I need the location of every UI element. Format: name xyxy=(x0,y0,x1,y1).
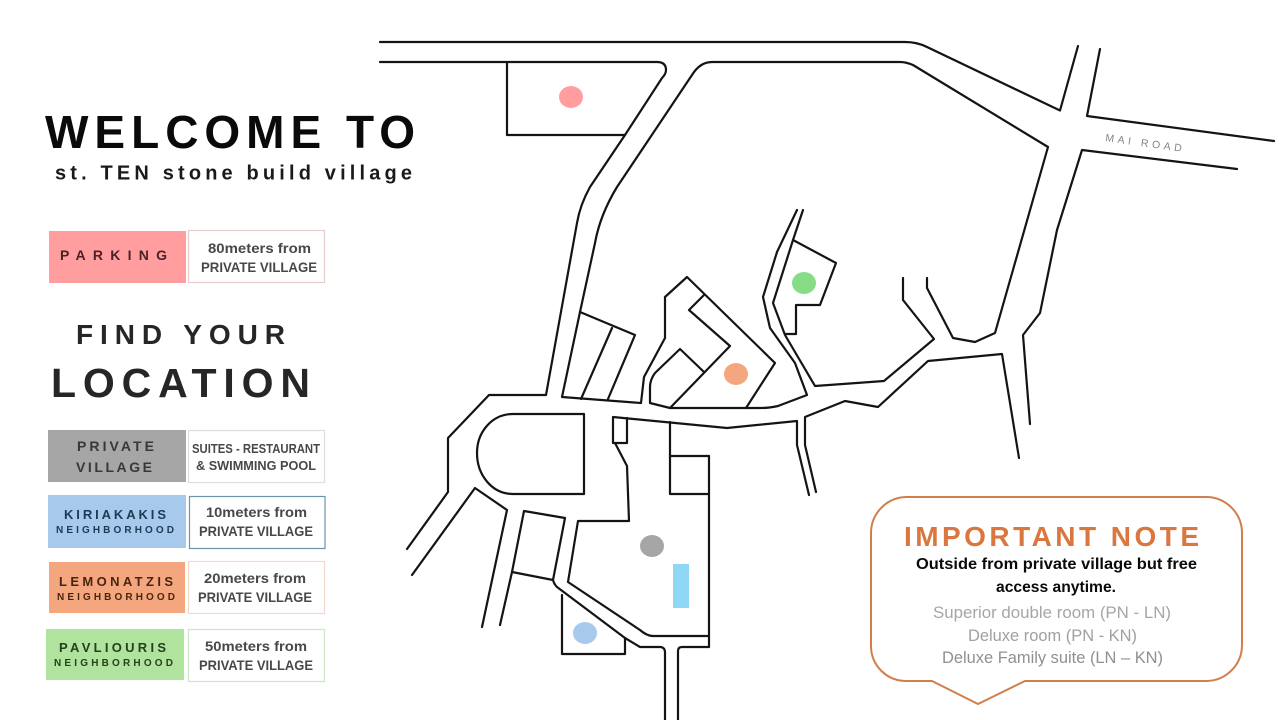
map marker: kiriakakis xyxy=(573,622,597,644)
legend row: pavliouris: NEIGHBORHOOD xyxy=(54,658,173,669)
legend row: private village: & SWIMMING POOL xyxy=(196,458,316,473)
map marker: swimming pool xyxy=(673,564,689,608)
callout: important note xyxy=(871,497,1242,704)
heading: find your location: FIND YOUR xyxy=(76,319,285,350)
legend row: parking: PARKING xyxy=(60,247,167,263)
callout: important note: IMPORTANT NOTE xyxy=(904,521,1199,552)
legend row: private village: VILLAGE xyxy=(76,459,152,475)
legend row: lemonatzis: NEIGHBORHOOD xyxy=(57,592,175,603)
legend row: kiriakakis: NEIGHBORHOOD xyxy=(56,525,174,536)
legend row: parking: PRIVATE VILLAGE xyxy=(201,259,317,275)
map marker: lemonatzis xyxy=(724,363,748,385)
callout: important note: access anytime. xyxy=(996,579,1116,596)
legend row: pavliouris: 50meters from xyxy=(205,638,307,654)
road label: mai road: MAI ROAD xyxy=(1105,132,1183,155)
legend row: pavliouris xyxy=(46,629,324,682)
map marker: parking xyxy=(559,86,583,108)
legend row: parking xyxy=(49,230,324,283)
callout: important note: Outside from private village but free xyxy=(916,556,1197,573)
map marker: private village xyxy=(640,535,664,557)
road map xyxy=(380,42,1274,720)
title: WELCOME TO xyxy=(45,106,415,158)
subtitle: st. TEN stone build village xyxy=(55,162,412,184)
callout: important note: Deluxe room (PN - KN) xyxy=(968,626,1137,645)
legend row: kiriakakis xyxy=(48,495,325,548)
legend row: private village: PRIVATE xyxy=(77,438,154,454)
legend row: kiriakakis: KIRIAKAKIS xyxy=(64,507,166,522)
legend row: private village xyxy=(48,430,324,482)
legend row: pavliouris: PAVLIOURIS xyxy=(59,640,166,655)
heading: find your location: LOCATION xyxy=(51,360,310,406)
map marker: pavliouris xyxy=(792,272,816,294)
legend row: parking: 80meters from xyxy=(208,240,311,256)
legend row: lemonatzis xyxy=(49,562,324,614)
legend row: lemonatzis: 20meters from xyxy=(204,570,306,586)
legend row: pavliouris: PRIVATE VILLAGE xyxy=(199,657,313,673)
title xyxy=(45,106,415,184)
callout: important note: Deluxe Family suite (LN – KN) xyxy=(942,648,1163,667)
legend row: private village: SUITES - RESTAURANT xyxy=(192,441,320,456)
heading: find your location xyxy=(51,319,310,406)
legend row: kiriakakis: PRIVATE VILLAGE xyxy=(199,523,313,539)
legend row: lemonatzis: PRIVATE VILLAGE xyxy=(198,589,312,605)
legend row: kiriakakis: 10meters from xyxy=(206,504,307,520)
callout: important note: Superior double room (PN - LN) xyxy=(933,603,1171,622)
legend row: lemonatzis: LEMONATZIS xyxy=(59,574,173,589)
